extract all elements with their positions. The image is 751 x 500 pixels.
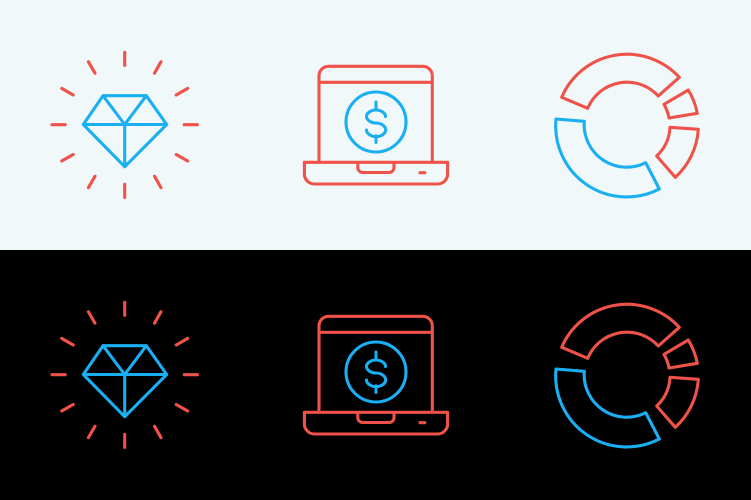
- icon: laptop with dollar on light: [304, 66, 448, 184]
- sparkle rays: [52, 302, 197, 447]
- diamond: [83, 96, 167, 167]
- sparkle rays: [52, 52, 197, 197]
- dollar coin: [346, 92, 406, 152]
- large top segment: [562, 304, 679, 358]
- lower right segment: [657, 127, 698, 177]
- lower right segment: [657, 377, 698, 427]
- icon: diamond with rays on black: [52, 302, 197, 447]
- blue segment: [556, 119, 659, 197]
- small right segment: [664, 90, 697, 118]
- icon: laptop with dollar on black: [304, 316, 448, 434]
- large top segment: [562, 54, 679, 108]
- panel: light background: [0, 0, 751, 250]
- dollar coin: [346, 342, 406, 402]
- laptop body: [304, 66, 448, 184]
- diamond: [83, 346, 167, 417]
- blue segment: [556, 369, 659, 447]
- icon: segmented donut chart on black: [556, 304, 698, 447]
- icon: diamond with rays on light: [52, 52, 197, 197]
- panel: black background: [0, 250, 751, 500]
- icon: segmented donut chart on light: [556, 54, 698, 197]
- laptop body: [304, 316, 448, 434]
- small right segment: [664, 340, 697, 368]
